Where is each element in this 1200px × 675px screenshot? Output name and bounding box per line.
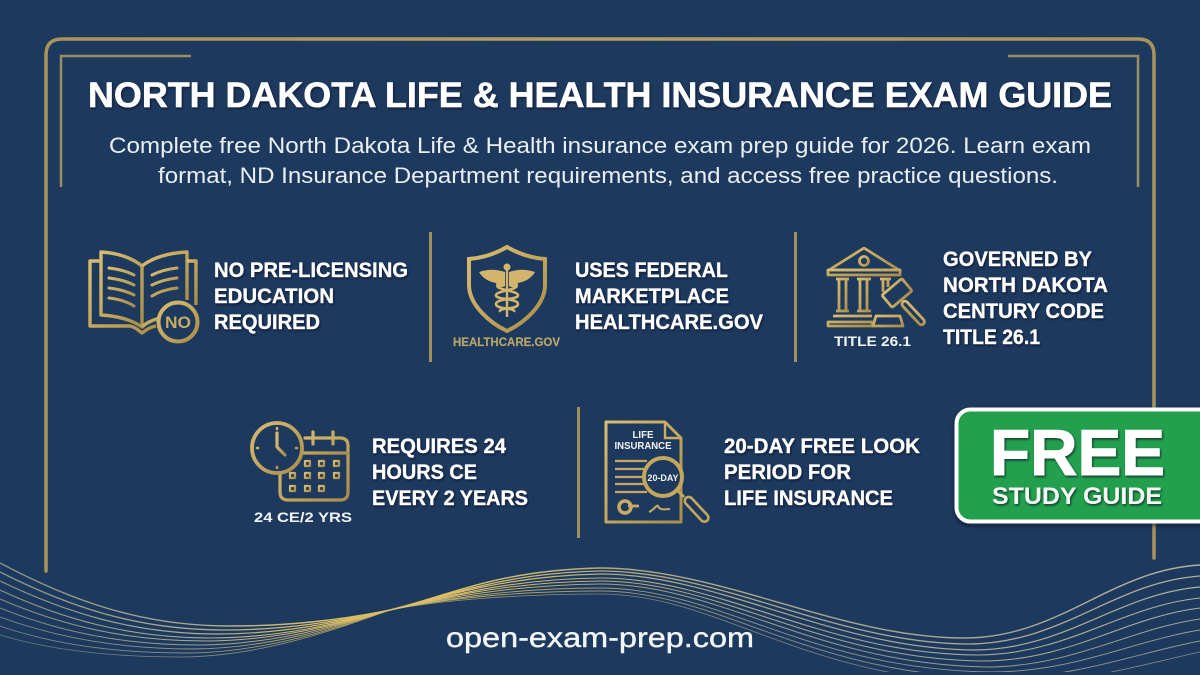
text: no pre-licensing: REQUIRED <box>214 311 320 334</box>
icon: shield with caduceus <box>469 247 545 331</box>
badge word free: FREE <box>990 416 1165 489</box>
text: continuing education: EVERY 2 YEARS <box>372 487 528 510</box>
icon: courthouse and gavel <box>828 248 926 326</box>
text: century code: NORTH DAKOTA <box>943 274 1108 297</box>
text: century code: CENTURY CODE <box>943 300 1104 323</box>
icon label healthcare.gov: HEALTHCARE.GOV <box>453 335 560 349</box>
text: century code <box>943 248 1108 349</box>
icon: clock and calendar <box>252 423 348 500</box>
icon label title 26.1: TITLE 26.1 <box>834 333 911 349</box>
outer gold frame <box>46 39 1154 571</box>
icon: policy document with magnifier <box>606 422 710 523</box>
badge study guide: STUDY GUIDE <box>992 483 1162 510</box>
divider 1 <box>429 232 432 362</box>
text: continuing education: REQUIRES 24 <box>372 435 506 458</box>
divider 3 <box>577 407 580 538</box>
magnifier label: 20-DAY <box>648 473 678 483</box>
text: century code: GOVERNED BY <box>943 248 1092 271</box>
inner corner bracket right <box>1008 56 1138 187</box>
feature: century code <box>828 248 1108 349</box>
document label: LIFE <box>632 430 654 441</box>
icon label NO: NO <box>165 313 191 332</box>
subtitle: format, ND Insurance Department requirements, and access free practice questions. <box>158 163 1058 188</box>
icon label 24 CE/2 YRS: 24 CE/2 YRS <box>254 509 352 525</box>
subtitle <box>109 133 1091 188</box>
text: federal marketplace <box>575 259 763 334</box>
inner corner bracket left <box>61 56 191 187</box>
icon: open book with NO badge <box>90 252 198 342</box>
divider 2 <box>794 232 797 362</box>
text: free look period <box>724 435 920 510</box>
text: no pre-licensing <box>214 259 408 334</box>
text: federal marketplace: HEALTHCARE.GOV <box>575 311 763 334</box>
decorative gold wave lines <box>0 563 1200 675</box>
title: NORTH DAKOTA LIFE & HEALTH INSURANCE EXAM GUIDE <box>88 76 1112 115</box>
text: free look period: 20-DAY FREE LOOK <box>724 435 920 458</box>
text: century code: TITLE 26.1 <box>943 326 1040 349</box>
subtitle: Complete free North Dakota Life & Health insurance exam prep guide for 2026. Learn exam <box>109 133 1091 158</box>
document label 2: INSURANCE <box>614 440 672 452</box>
text: free look period: PERIOD FOR <box>724 461 851 484</box>
feature: federal marketplace <box>453 247 763 349</box>
text: continuing education <box>372 435 528 510</box>
feature: no pre-licensing education <box>90 252 408 342</box>
feature: free look period <box>606 422 920 523</box>
badge: free study guide <box>956 410 1200 522</box>
text: federal marketplace: MARKETPLACE <box>575 285 729 308</box>
feature: continuing education <box>252 423 528 525</box>
footer url: open-exam-prep.com <box>446 622 754 653</box>
text: free look period: LIFE INSURANCE <box>724 487 893 510</box>
text: continuing education: HOURS CE <box>372 461 477 484</box>
text: no pre-licensing: NO PRE-LICENSING <box>214 259 408 282</box>
text: federal marketplace: USES FEDERAL <box>575 259 728 282</box>
text: no pre-licensing: EDUCATION <box>214 285 334 308</box>
